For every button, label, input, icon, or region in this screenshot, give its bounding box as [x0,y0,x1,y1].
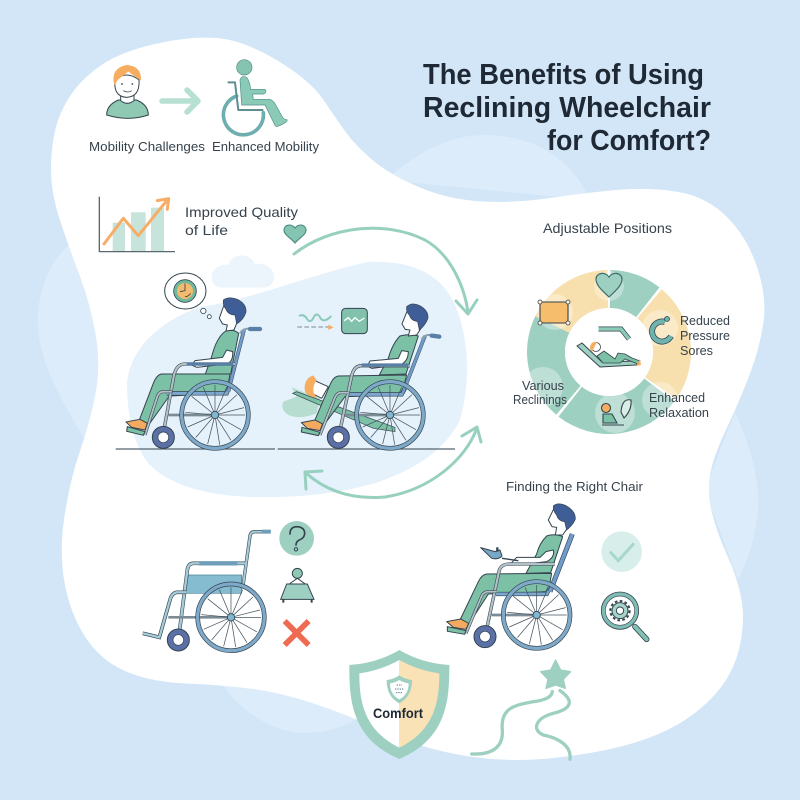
wheelchair: reclined [301,304,439,448]
pale background blob: right [705,412,758,580]
title: Reclining Wheelchair [423,92,711,124]
label: reduced pressure sores [680,313,730,358]
icon: pillow [538,300,570,325]
wheelchair: reclined with controller [447,504,575,648]
label: various reclinings: Reclinings [513,392,567,407]
icon: wave to monitor [297,308,367,334]
panel: adjustable positions [513,220,730,434]
title [423,59,711,157]
ring diagram [523,270,691,434]
pale background blob: left [38,244,102,440]
icon: leaf and figure [602,400,631,425]
icon: cross [285,621,309,645]
panel: finding the right chair [447,479,647,648]
light blue blob behind wheelchairs [127,262,467,497]
thought bubble [165,273,211,319]
label: improved quality: Improved Quality [185,204,298,220]
label: enhanced mobility: Enhanced Mobility [212,139,319,154]
pale background blob: bottom [222,684,358,733]
heading: Adjustable Positions [543,220,672,236]
panel: comfort shield and path [349,650,571,759]
icon: rotation [652,316,671,342]
lying figure on leg rest [282,375,395,432]
icon: heart [596,273,622,297]
center reclining icon [565,308,653,396]
circular arrow: bottom [305,427,481,498]
heading: Finding the Right Chair [506,479,644,494]
icon: check [601,531,642,572]
icon: wheelchair user [223,60,287,135]
label: enhanced relaxation: Relaxation [649,405,709,420]
label: enhanced relaxation [649,390,709,420]
title: for Comfort? [547,125,711,157]
icon: magnifier with gear [601,592,647,639]
circular arrow: top [294,228,477,314]
star goal [541,660,571,688]
arrow: mobility [162,90,198,112]
ground lines [116,447,455,451]
label: of life: of Life [185,222,228,238]
label: various reclinings [513,378,567,407]
panel: wheelchair comparison [116,255,455,449]
label: reduced pressure sores: Pressure [680,328,730,343]
label: enhanced relaxation: Enhanced [649,390,705,405]
decorative cloud [212,255,274,288]
label: comfort: Comfort [373,706,423,721]
icon: question [279,521,314,556]
label: mobility challenges: Mobility Challenges [89,139,206,154]
wheelchair: empty [143,532,271,651]
panel: improved quality of life [99,197,306,252]
icon: weight [281,568,314,603]
label: reduced pressure sores: Reduced [680,313,730,328]
icon: heart [284,225,306,243]
panel: mobility transition [89,60,319,154]
pale background blob: top [385,135,590,200]
chart: rising trend [99,197,175,252]
icon: person [107,65,148,118]
title: The Benefits of Using [423,59,704,91]
shield [349,650,449,759]
label: various reclinings: Various [522,378,564,393]
wheelchair: seated upright [126,298,260,448]
panel: standard wheelchair [143,521,314,651]
winding path [472,691,570,759]
label: reduced pressure sores: Sores [680,343,713,358]
